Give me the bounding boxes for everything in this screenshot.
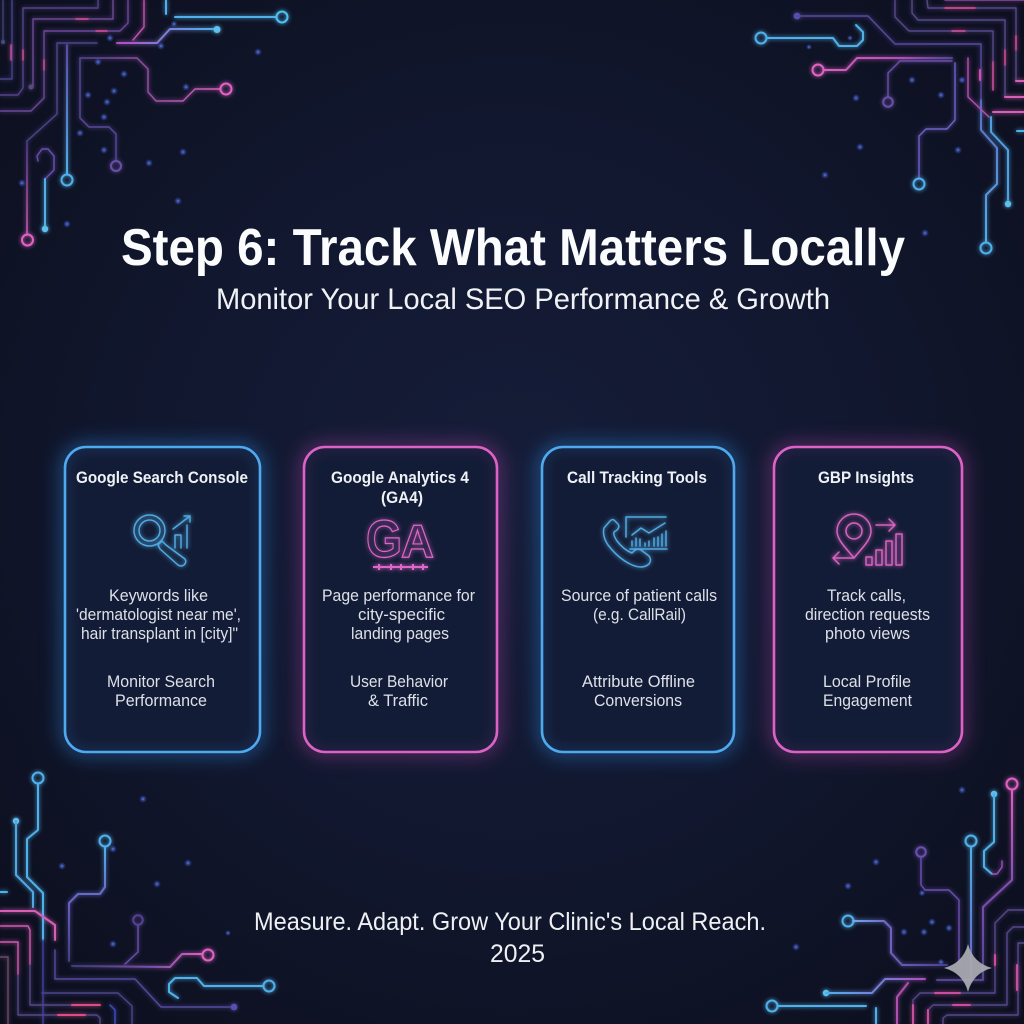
body text: city-specific: [358, 606, 445, 624]
heading: [331, 468, 469, 507]
body text: Keywords like: [109, 587, 208, 605]
body text: direction requests: [805, 606, 930, 624]
panel: GBP Insights: [774, 447, 962, 752]
body text: landing pages: [351, 625, 449, 643]
body text: 'dermatologist near me',: [76, 606, 241, 624]
icon: magnifier with growth chart: [134, 515, 190, 566]
heading: Google Analytics 4: [331, 468, 469, 487]
icon: map pin with arrows and bars: [833, 514, 902, 565]
caption: & Traffic: [368, 692, 428, 710]
caption: Performance: [115, 692, 207, 710]
footer year: 2025: [490, 940, 545, 968]
caption: Local Profile: [823, 673, 911, 691]
icon: sparkle watermark: [944, 944, 992, 992]
circuit traces: top-right corner: [756, 0, 1024, 254]
icon: GA logo: G: [366, 510, 402, 569]
body text: [76, 587, 241, 643]
body text: (e.g. CallRail): [593, 606, 686, 624]
caption: Attribute Offline: [582, 673, 695, 691]
body text: [322, 587, 475, 643]
caption: [350, 673, 448, 710]
body text: Page performance for: [322, 587, 475, 605]
heading: Call Tracking Tools: [567, 468, 707, 487]
icon: GA logo: [366, 510, 434, 570]
footer tagline: Measure. Adapt. Grow Your Clinic's Local Reach.: [254, 908, 766, 936]
caption: [582, 673, 695, 710]
caption: User Behavior: [350, 673, 448, 691]
panel: Google Search Console: [65, 447, 260, 752]
title: Step 6: Track What Matters Locally: [121, 219, 905, 277]
body text: Source of patient calls: [561, 587, 717, 605]
icon: phone with chart: [604, 517, 667, 567]
body text: [561, 587, 717, 624]
heading: Google Search Console: [76, 468, 248, 487]
caption: [107, 673, 215, 710]
circuit traces: bottom-left corner: [0, 772, 274, 1024]
icon: GA logo: A: [401, 515, 434, 567]
circuit traces: top-left corner: [0, 0, 288, 246]
body text: photo views: [825, 625, 910, 643]
heading: GBP Insights: [818, 468, 914, 487]
body text: Track calls,: [827, 587, 906, 605]
caption: Engagement: [823, 692, 912, 710]
body text: [805, 587, 930, 643]
panel: Call Tracking Tools: [542, 447, 734, 752]
caption: [823, 673, 912, 710]
circuit traces: bottom-right corner: [766, 778, 1024, 1024]
caption: Conversions: [594, 692, 682, 710]
body text: hair transplant in [city]": [81, 625, 238, 643]
panel: Google Analytics 4: [304, 447, 497, 752]
subtitle: Monitor Your Local SEO Performance & Growth: [216, 283, 830, 316]
heading: (GA4): [381, 488, 423, 507]
caption: Monitor Search: [107, 673, 215, 691]
